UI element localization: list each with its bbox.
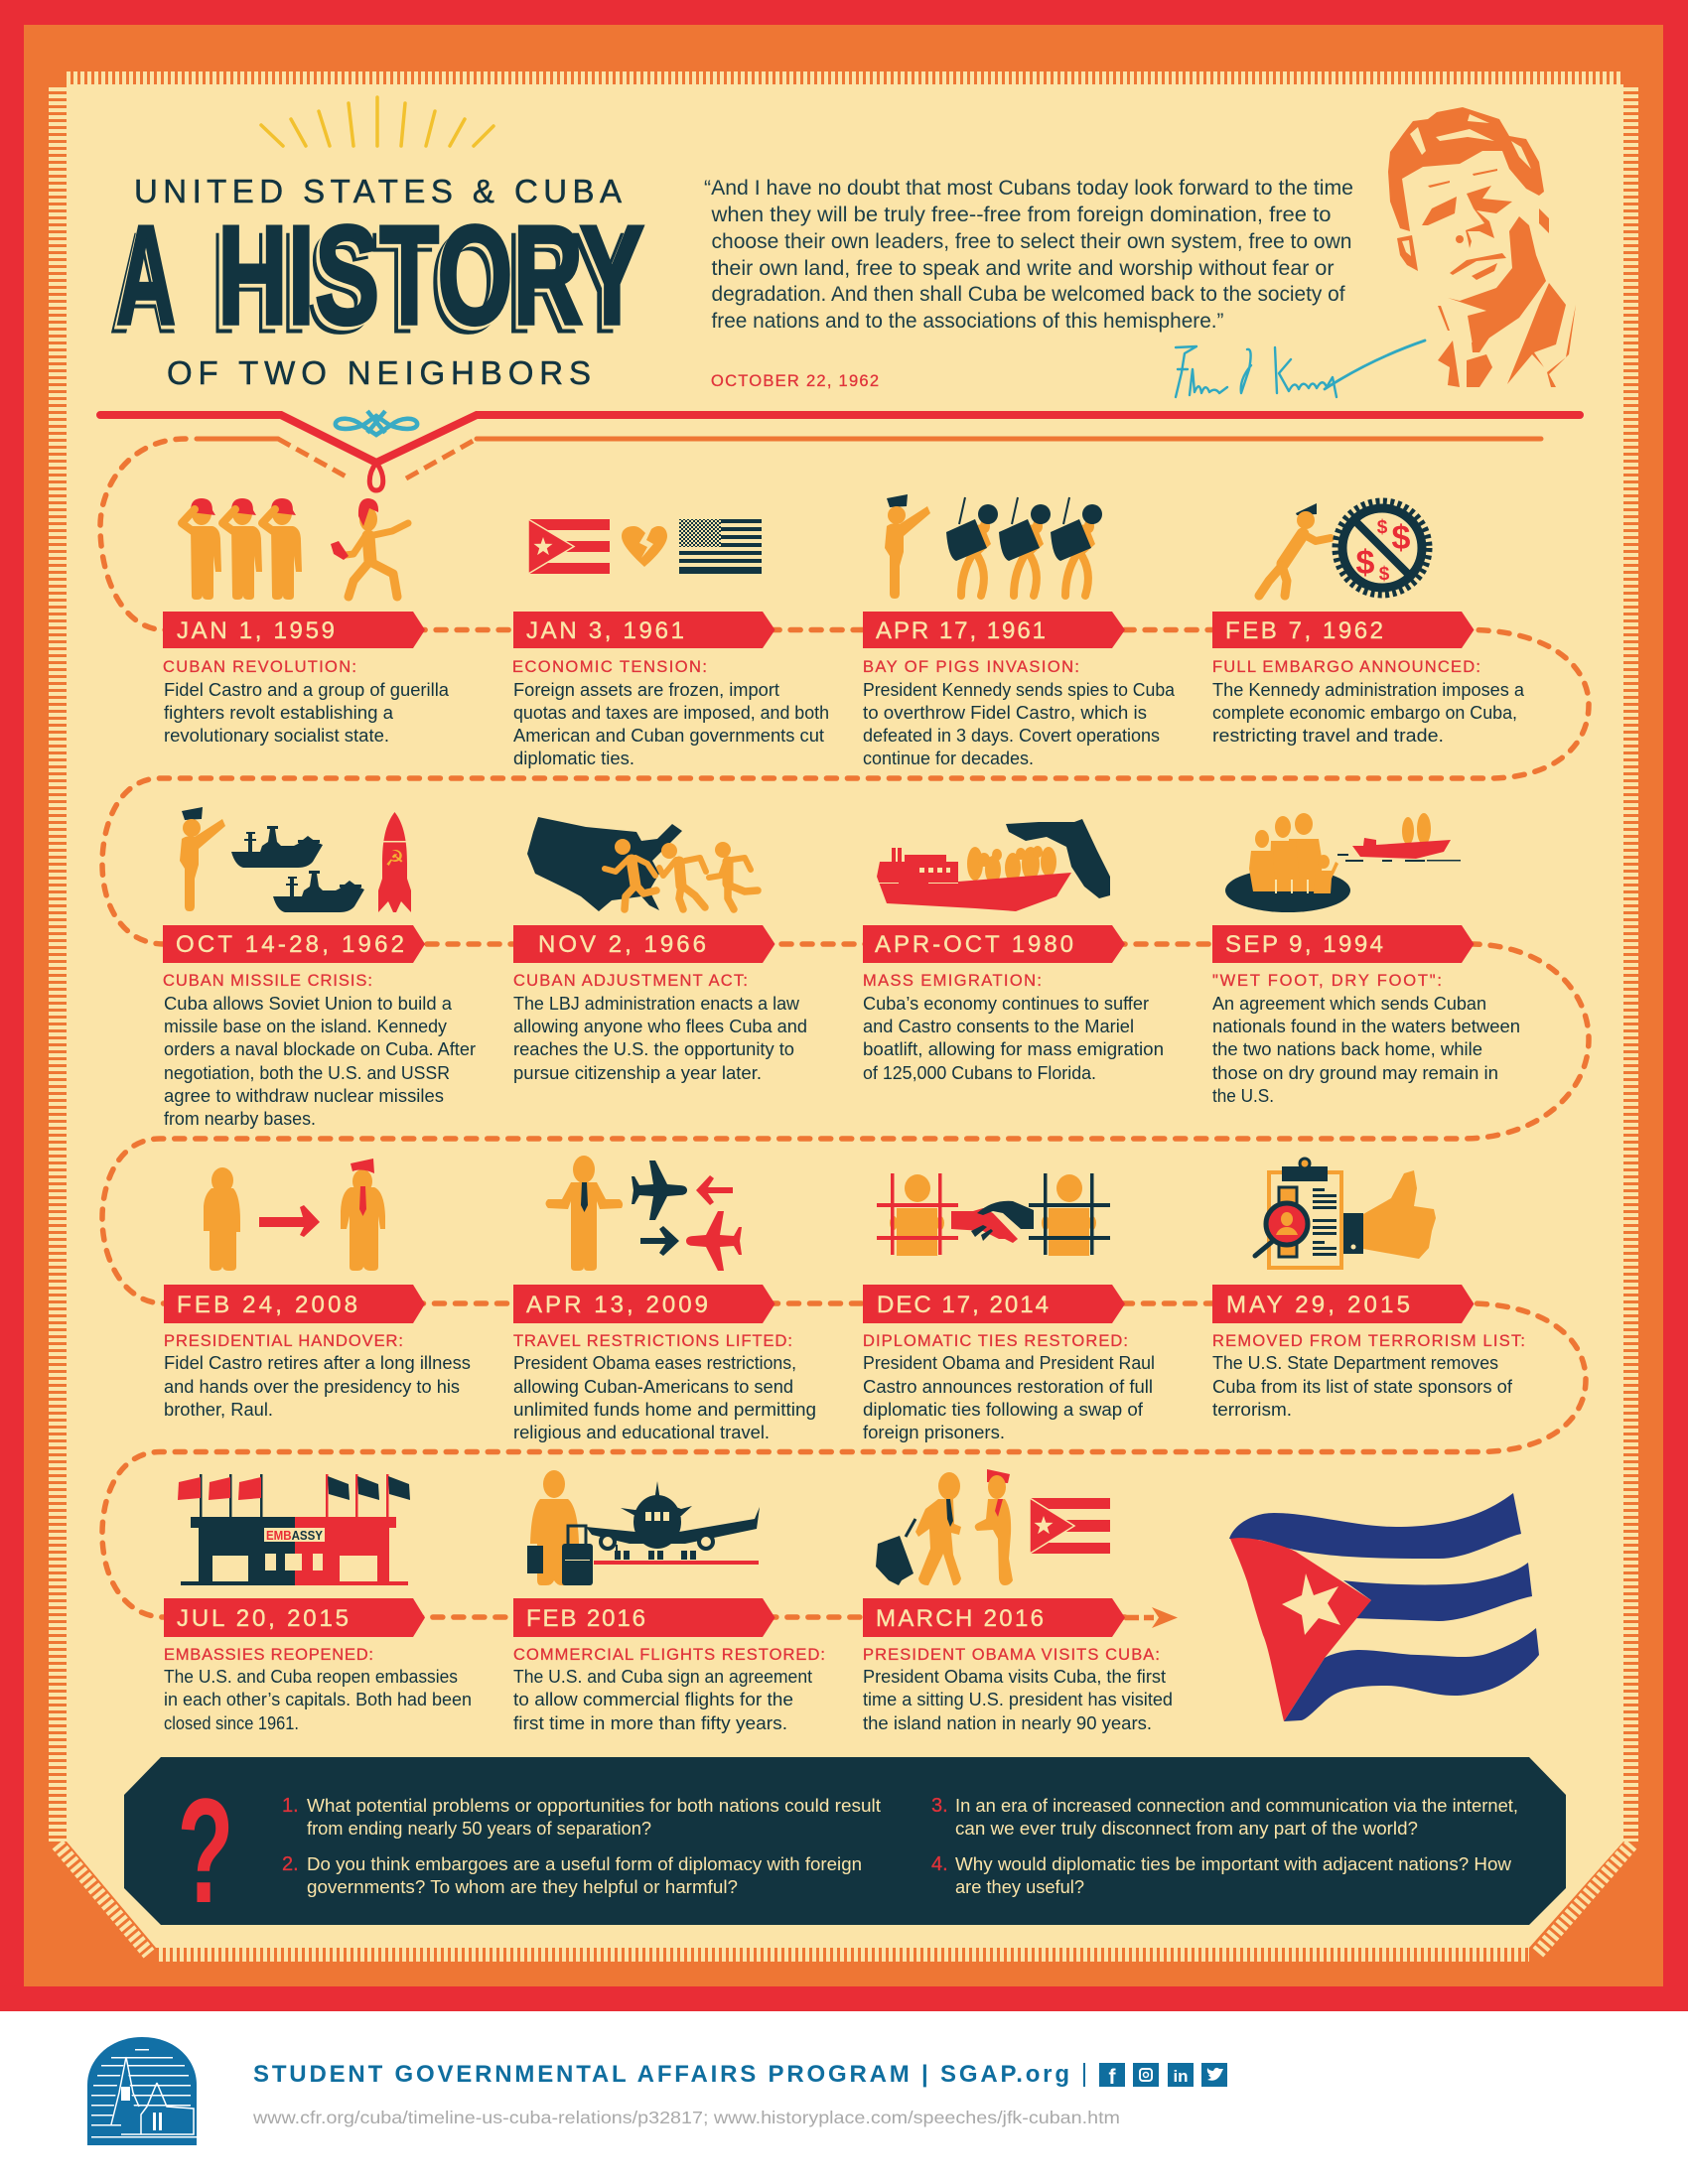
icon: prisoners behind bars and handshake xyxy=(877,1173,1110,1256)
date label: DEC 17, 2014 xyxy=(877,1292,1049,1318)
date label: JAN 3, 1961 xyxy=(526,617,684,644)
quote from JFK: “And I have no doubt that most Cubans today look forward to the time xyxy=(704,177,1353,200)
heading: ECONOMIC TENSION: xyxy=(512,658,707,676)
title line: of two neighbors: OF TWO NEIGHBORS xyxy=(167,354,591,391)
description: reaches the U.S. the opportunity to xyxy=(513,1039,794,1059)
heading: CUBAN REVOLUTION: xyxy=(163,658,356,676)
divider xyxy=(1083,2063,1085,2087)
description: brother, Raul. xyxy=(164,1400,273,1420)
timeline dashed path xyxy=(100,439,1589,1617)
event: March 2016 President Obama Visits Cuba xyxy=(863,1469,1178,1733)
date label xyxy=(1212,1285,1474,1323)
date label xyxy=(513,612,774,648)
description: first time in more than fifty years. xyxy=(513,1713,787,1733)
event: May 29, 2015 Removed From Terrorism List xyxy=(1212,1159,1525,1420)
heading: "WET FOOT, DRY FOOT": xyxy=(1212,972,1442,990)
question 4 xyxy=(931,1853,1512,1897)
question 4: are they useful? xyxy=(955,1876,1084,1897)
description: continue for decades. xyxy=(863,749,1034,768)
question 1: from ending nearly 50 years of separation? xyxy=(307,1818,651,1839)
title: A History with drop shadow: A xyxy=(110,205,176,362)
title: A History with drop shadow: HISTORY xyxy=(213,201,642,358)
heading: PRESIDENT OBAMA VISITS CUBA: xyxy=(863,1646,1160,1664)
description: American and Cuban governments cut xyxy=(513,726,824,746)
date label xyxy=(163,612,425,648)
date label xyxy=(163,925,425,963)
icon: man pushing a no-dollars gear: $ xyxy=(1377,517,1388,538)
description xyxy=(164,1667,472,1733)
description: the island nation in nearly 90 years. xyxy=(863,1713,1152,1733)
event: Apr 17, 1961 Bay of Pigs xyxy=(863,494,1176,768)
footer xyxy=(87,2037,1227,2145)
date label: JAN 1, 1959 xyxy=(177,617,335,644)
heading: TRAVEL RESTRICTIONS LIFTED: xyxy=(513,1332,792,1350)
description: allowing Cuban-Americans to send xyxy=(513,1377,793,1397)
date label xyxy=(513,1598,774,1637)
question 1: What potential problems or opportunities for both nations could result xyxy=(307,1795,881,1816)
title: A History with drop shadow: A xyxy=(113,201,177,358)
header divider rules with knot ornament xyxy=(100,411,1580,490)
title: A History with drop shadow: A xyxy=(116,197,176,354)
icon: man pushing a no-dollars gear: $ xyxy=(1379,564,1390,585)
icon: SGAP logo with church xyxy=(87,2037,197,2145)
date label xyxy=(513,925,774,963)
question 3: can we ever truly disconnect from any part of the world? xyxy=(955,1818,1418,1839)
description: the two nations back home, while xyxy=(1212,1039,1482,1059)
question 3: 3. xyxy=(931,1795,948,1817)
description: President Obama visits Cuba, the first xyxy=(863,1667,1166,1687)
description xyxy=(1212,680,1525,746)
date label: APR-OCT 1980 xyxy=(875,931,1073,958)
icon: Cuban flag, broken heart and US flag xyxy=(528,519,762,574)
description: the U.S. xyxy=(1212,1086,1274,1106)
description: unlimited funds home and permitting xyxy=(513,1400,816,1420)
quote from JFK xyxy=(704,177,1353,333)
description: time a sitting U.S. president has visited xyxy=(863,1690,1173,1709)
description: nationals found in the waters between xyxy=(1212,1017,1520,1036)
description: agree to withdraw nuclear missiles xyxy=(164,1086,444,1106)
icon: question mark: ? xyxy=(177,1767,234,1934)
description: terrorism. xyxy=(1212,1400,1292,1420)
description xyxy=(863,1667,1173,1733)
description: Fidel Castro retires after a long illness xyxy=(164,1353,471,1373)
icon: officer, warships and Soviet missile: ☭ xyxy=(385,847,404,872)
heading: PRESIDENTIAL HANDOVER: xyxy=(164,1332,403,1350)
question 4: 4. xyxy=(931,1853,948,1875)
description: quotas and taxes are imposed, and both xyxy=(513,703,829,723)
description: and Castro consents to the Mariel xyxy=(863,1017,1134,1036)
description: those on dry ground may remain in xyxy=(1212,1063,1498,1083)
description xyxy=(513,680,829,768)
description: diplomatic ties. xyxy=(513,749,634,768)
icon: man pushing a no-dollars gear xyxy=(1259,501,1429,596)
description: The U.S. and Cuba sign an agreement xyxy=(513,1667,812,1687)
description: boatlift, allowing for mass emigration xyxy=(863,1039,1164,1059)
icon: man pushing a no-dollars gear: $ xyxy=(1356,544,1375,582)
header: title block xyxy=(110,97,644,391)
icon: Obama with suitcase greeting Castro beside Cuban flag xyxy=(876,1469,1110,1585)
event: Apr 13, 2009 Travel Restrictions Lifted xyxy=(513,1156,816,1442)
icon: large waving Cuban flag xyxy=(1229,1493,1539,1721)
event: Apr-Oct 1980 Mass Emigration xyxy=(863,819,1164,1083)
program name: STUDENT GOVERNMENTAL AFFAIRS PROGRAM | SGAP.org xyxy=(253,2061,1069,2088)
event: Jul 20, 2015 Embassies Reopened xyxy=(164,1474,472,1733)
description: missile base on the island. Kennedy xyxy=(164,1017,447,1036)
description: in each other’s capitals. Both had been xyxy=(164,1690,472,1709)
date label xyxy=(863,1285,1125,1323)
description: closed since 1961. xyxy=(164,1713,299,1733)
description: to overthrow Fidel Castro, which is xyxy=(863,703,1147,723)
question 1 xyxy=(282,1795,881,1839)
heading: REMOVED FROM TERRORISM LIST: xyxy=(1212,1332,1525,1350)
title: A History with drop shadow xyxy=(110,197,644,362)
description xyxy=(513,994,807,1083)
quote date: OCTOBER 22, 1962 xyxy=(711,372,879,390)
date label: OCT 14-28, 1962 xyxy=(176,931,404,958)
heading: COMMERCIAL FLIGHTS RESTORED: xyxy=(513,1646,825,1664)
question 2: 2. xyxy=(282,1853,299,1875)
heading: CUBAN ADJUSTMENT ACT: xyxy=(513,972,748,990)
description: restricting travel and trade. xyxy=(1212,726,1444,746)
description: revolutionary socialist state. xyxy=(164,726,389,746)
icon: Fidel to Raul handover with arrow xyxy=(204,1159,385,1271)
date label xyxy=(513,1285,774,1323)
description: negotiation, both the U.S. and USSR xyxy=(164,1063,450,1083)
icon: family on land and people on boat xyxy=(1225,813,1461,912)
icon: officer and three soldiers with backpacks xyxy=(885,494,1102,599)
description: of 125,000 Cubans to Florida. xyxy=(863,1063,1096,1083)
social icons xyxy=(1099,2063,1227,2089)
arrow: timeline end xyxy=(1125,1607,1178,1628)
description xyxy=(863,994,1164,1083)
description xyxy=(863,680,1176,768)
date label xyxy=(164,1285,425,1323)
icon: clipboard, magnifier and thumbs up xyxy=(1255,1159,1436,1268)
event: Feb 7, 1962 Full Embargo xyxy=(1212,501,1525,746)
icon: teal knot ornament xyxy=(336,411,417,435)
description: pursue citizenship a year later. xyxy=(513,1063,762,1083)
date label xyxy=(1212,925,1474,963)
description: diplomatic ties following a swap of xyxy=(863,1400,1144,1420)
event: Dec 17, 2014 Diplomatic Ties Restored xyxy=(863,1173,1155,1442)
signature xyxy=(1176,341,1425,397)
icon: US map with running figures xyxy=(527,817,758,911)
question 3 xyxy=(931,1795,1518,1839)
description xyxy=(164,680,450,746)
description: Fidel Castro and a group of guerilla xyxy=(164,680,450,700)
icon: man pushing a no-dollars gear: $ xyxy=(1392,519,1411,557)
quote from JFK: choose their own leaders, free to select their own system, free to own xyxy=(711,230,1352,253)
description xyxy=(1212,994,1520,1106)
portrait of John F. Kennedy xyxy=(1388,107,1576,387)
heading: MASS EMIGRATION: xyxy=(863,972,1042,990)
description: Castro announces restoration of full xyxy=(863,1377,1153,1397)
description: The U.S. and Cuba reopen embassies xyxy=(164,1667,458,1687)
title line: United States & Cuba: UNITED STATES & CUBA xyxy=(134,173,622,209)
date label: FEB 7, 1962 xyxy=(1225,617,1383,644)
description: The Kennedy administration imposes a xyxy=(1212,680,1525,700)
event: Sep 9, 1994 Wet Foot, Dry Foot xyxy=(1212,813,1520,1106)
date label: MARCH 2016 xyxy=(876,1605,1044,1632)
date label xyxy=(863,1598,1125,1637)
description: Cuba allows Soviet Union to build a xyxy=(164,994,453,1014)
icon: officer, warships and Soviet missile xyxy=(180,807,411,912)
description: from nearby bases. xyxy=(164,1109,316,1129)
description: President Kennedy sends spies to Cuba xyxy=(863,680,1176,700)
question 1: 1. xyxy=(282,1795,299,1817)
description: allowing anyone who flees Cuba and xyxy=(513,1017,807,1036)
heading: EMBASSIES REOPENED: xyxy=(164,1646,373,1664)
date label xyxy=(863,925,1125,963)
question 3: In an era of increased connection and communication via the internet, xyxy=(955,1795,1518,1816)
heading: BAY OF PIGS INVASION: xyxy=(863,658,1079,676)
date label: MAY 29, 2015 xyxy=(1226,1292,1410,1318)
date label xyxy=(863,612,1125,648)
question 4: Why would diplomatic ties be important with adjacent nations? How xyxy=(955,1853,1512,1874)
date label: FEB 24, 2008 xyxy=(177,1292,357,1318)
event: Nov 2, 1966 Cuban Adjustment Act xyxy=(513,817,807,1083)
description: defeated in 3 days. Covert operations xyxy=(863,726,1160,746)
description xyxy=(513,1667,812,1733)
icon: embassy building with flags xyxy=(178,1474,410,1585)
event: Jan 3, 1961 Economic Tension xyxy=(512,519,829,768)
description xyxy=(1212,1353,1513,1420)
date label: APR 17, 1961 xyxy=(876,617,1046,644)
date label: JUL 20, 2015 xyxy=(177,1605,349,1632)
date label xyxy=(164,1598,425,1637)
event: Oct 14-28, 1962 Cuban Missile Crisis xyxy=(163,807,476,1129)
icon: saluting soldiers and stone thrower xyxy=(182,498,408,600)
description: religious and educational travel. xyxy=(513,1423,770,1442)
description: Foreign assets are frozen, import xyxy=(513,680,779,700)
date label: FEB 2016 xyxy=(526,1605,645,1632)
sun rays xyxy=(261,97,493,146)
description: and hands over the presidency to his xyxy=(164,1377,460,1397)
social icons: f xyxy=(1108,2066,1116,2089)
quote from JFK: degradation. And then shall Cuba be welcomed back to the society of xyxy=(711,283,1345,306)
question 2: governments? To whom are they helpful or harmful? xyxy=(307,1876,738,1897)
icon: Obama with planes and arrows xyxy=(546,1156,742,1271)
quote from JFK: their own land, free to speak and write and worship without fear or xyxy=(711,257,1335,280)
social icons: in xyxy=(1173,2067,1189,2086)
heading: CUBAN MISSILE CRISIS: xyxy=(163,972,372,990)
quote from JFK: when they will be truly free--free from foreign domination, free to xyxy=(710,204,1331,226)
description xyxy=(513,1353,816,1442)
title: A History with drop shadow: HISTORY xyxy=(217,197,644,354)
date label xyxy=(1212,612,1474,648)
event: Feb 2016 Commercial Flights Restored xyxy=(513,1470,825,1733)
icon: embassy building with flags: EMBASSY xyxy=(266,1528,323,1543)
question 2: Do you think embargoes are a useful form of diplomacy with foreign xyxy=(307,1853,862,1874)
description: to allow commercial flights for the xyxy=(513,1690,793,1709)
description: orders a naval blockade on Cuba. After xyxy=(164,1039,476,1059)
panel: discussion questions xyxy=(124,1757,1566,1934)
description: The LBJ administration enacts a law xyxy=(513,994,800,1014)
quote from JFK: free nations and to the associations of this hemisphere.” xyxy=(711,310,1223,333)
description: An agreement which sends Cuban xyxy=(1212,994,1486,1014)
description: complete economic embargo on Cuba, xyxy=(1212,703,1517,723)
description: Cuba’s economy continues to suffer xyxy=(863,994,1149,1014)
description: The U.S. State Department removes xyxy=(1212,1353,1498,1373)
description xyxy=(164,1353,471,1420)
description: foreign prisoners. xyxy=(863,1423,1005,1442)
heading: DIPLOMATIC TIES RESTORED: xyxy=(863,1332,1128,1350)
description: fighters revolt establishing a xyxy=(164,703,394,723)
description: Cuba from its list of state sponsors of xyxy=(1212,1377,1513,1397)
description: President Obama and President Raul xyxy=(863,1353,1155,1373)
title: A History with drop shadow: HISTORY xyxy=(211,205,637,362)
date label: APR 13, 2009 xyxy=(526,1292,708,1318)
description: President Obama eases restrictions, xyxy=(513,1353,796,1373)
description xyxy=(863,1353,1155,1442)
source URLs: www.cfr.org/cuba/timeline-us-cuba-relations/p32817; www.historyplace.com/speeches/jfk-cuban.htm xyxy=(252,2108,1120,2127)
date label: SEP 9, 1994 xyxy=(1225,931,1383,958)
icon: traveller with luggage and airplane xyxy=(527,1470,760,1585)
question 2 xyxy=(282,1853,862,1897)
date label: NOV 2, 1966 xyxy=(538,931,706,958)
event: Feb 24, 2008 Presidential Handover xyxy=(164,1159,471,1420)
heading: FULL EMBARGO ANNOUNCED: xyxy=(1212,658,1480,676)
icon: crowded boat and Florida xyxy=(877,819,1110,911)
event: Jan 1, 1959 Cuban Revolution xyxy=(163,498,450,746)
description xyxy=(164,994,476,1129)
